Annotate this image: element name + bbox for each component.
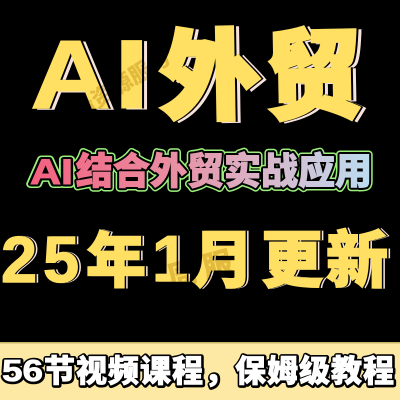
update date: 25年1月更新 xyxy=(1,210,391,300)
bottom banner xyxy=(0,342,400,400)
watermark over title: 前沿资源服务 xyxy=(47,40,176,137)
watermark over date: 周 服 xyxy=(161,237,237,297)
title: AI外贸 xyxy=(30,0,368,142)
banner text: 56节视频课程，保姆级教程 xyxy=(2,346,396,392)
subtitle: AI结合外贸实战应用 xyxy=(30,141,372,195)
